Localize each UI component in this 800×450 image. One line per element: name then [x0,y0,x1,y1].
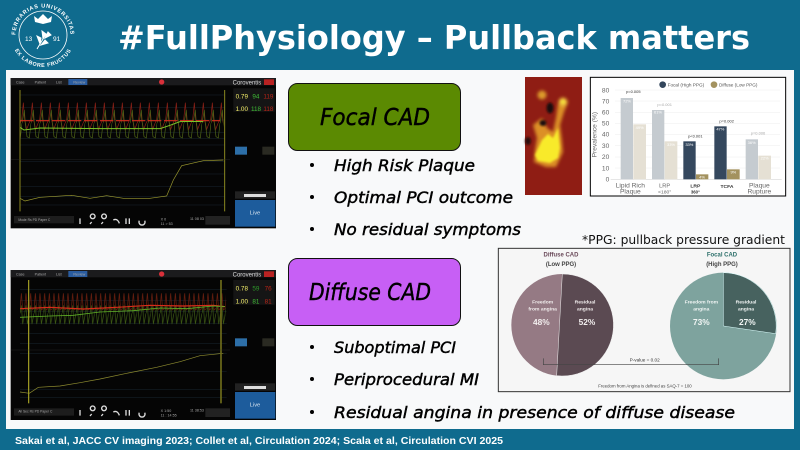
panel: diffuse CAD pressure monitor: 11 : 14:55 [161,413,177,417]
panel: diffuse CAD pressure monitor: Case [16,273,25,277]
panel: diffuse CAD pressure monitor: List [56,273,62,277]
p-values: p=0.001 [657,102,673,107]
p-values: p<0.001 [688,133,703,138]
pie chart: diffuse CAD: (Low PPG) [546,262,576,268]
category labels: Plaque [749,182,770,189]
chart axis: 10 [602,165,610,172]
pie chart: focal CAD [670,253,777,379]
focal CAD bullet list [310,156,521,239]
bar chart: plaque features by PPG [590,77,786,196]
panel: focal CAD pressure monitor [11,78,276,228]
pie chart: diffuse CAD: from angina [528,307,557,313]
p-values: p=0.005 [626,89,641,94]
pie chart: focal CAD: Focal CAD [707,253,738,259]
pie chart: focal CAD: 27% [739,317,756,327]
p-values: p=0.006 [751,131,766,136]
panel: diffuse CAD pressure monitor: 81 [252,298,260,305]
chart axis: 0 [606,177,610,184]
pie chart: diffuse CAD: 52% [579,317,596,327]
chart axis: 80 [602,87,610,94]
bar value labels: 33% [685,142,694,147]
category labels: Lipid Rich [616,182,645,189]
pie chart: focal CAD: Residual [736,300,757,306]
bar value labels: 47% [716,127,725,132]
panel: focal CAD pressure monitor: 11 08 03 [190,217,204,221]
panel: diffuse CAD pressure monitor: Coroventis [233,272,261,278]
panel: freedom from angina pie charts [498,248,790,392]
panel: focal CAD pressure monitor: 11 > 53 [161,222,173,226]
panel: focal CAD pressure monitor: 1.00 [236,106,248,113]
panel: focal CAD pressure monitor: 0.79 [236,94,248,101]
panel: diffuse CAD pressure monitor: Review [73,273,86,277]
logo: university seal: 91 [53,36,61,43]
footnote: PPG definition: *PPG: pullback pressure gradient [582,232,785,247]
category labels [616,182,771,195]
p-value bracket [543,357,719,365]
p-value bracket: P-value = 0.02 [630,357,660,362]
category labels: Plaque [620,188,641,195]
category labels: 360° [691,189,700,194]
panel: focal CAD pressure monitor: Review [73,80,86,84]
chart bars [621,98,771,179]
title: #FullPhysiology – Pullback matters [118,18,750,57]
references: Sakai et al, JACC CV imaging 2023; Collet et al, Circulation 2024; Scala et al, Circulation CVI 2025 [15,435,503,447]
pie chart: diffuse CAD: angina [577,307,593,313]
bar value labels: 61% [654,109,662,114]
chart axis: 70 [602,98,610,105]
diffuse CAD bullet list: Suboptimal PCI [334,338,456,357]
panel: diffuse CAD pressure monitor: All Sec Rs PD Paper C [18,410,53,414]
chart axis: 50 [602,121,610,128]
pie chart: focal CAD: angina [738,307,754,313]
panel: diffuse CAD pressure monitor: 11 38:53 [190,409,204,413]
category labels: LRP [690,183,701,189]
pie chart: focal CAD: angina [693,307,710,313]
bar value labels: 22% [761,155,769,160]
panel: focal CAD pressure monitor: 118 [263,106,274,113]
logo: university seal [12,4,74,67]
p-values [626,89,766,138]
panel: diffuse CAD pressure monitor: 76 [265,286,272,293]
bar value labels: 36% [748,140,756,145]
logo: university seal: FERRARIAS UNIVERSITAS [12,4,74,35]
chart axis: Prevalence (%) [591,112,598,157]
pie chart: diffuse CAD: Freedom [532,300,554,306]
focal CAD bullet list: Optimal PCI outcome [334,188,513,207]
content panel [6,70,794,429]
panel: diffuse CAD pressure monitor: 59 [252,286,260,293]
pie chart: diffuse CAD: 48% [533,317,550,327]
panel: diffuse CAD pressure monitor: 81 [265,298,272,305]
chart axis: 40 [602,132,610,139]
chart legend: Diffuse (Low PPG) [719,82,758,87]
bar value labels: 4% [699,175,705,180]
p-values: p=0.002 [719,118,735,123]
diffuse CAD bullet list [310,338,735,422]
panel: focal CAD pressure monitor: 118 [251,106,262,113]
chart legend: Focal (High PPG) [668,82,705,87]
category labels: TCFA [720,184,734,190]
chart legend [659,81,758,88]
panel: diffuse CAD pressure monitor: Patient [35,273,46,277]
panel: diffuse CAD pressure monitor: 1.00 [236,298,248,305]
definition note: Freedom from Angina is defined as SAQ-7 = 100 [598,384,692,389]
bar value labels: 72% [623,98,631,103]
pie chart: focal CAD: (High PPG) [706,262,738,268]
bar value labels [623,98,769,180]
heat map: plaque image [525,77,582,195]
panel: focal CAD pressure monitor: Case [16,80,25,84]
chart axis [591,87,782,184]
panel: focal CAD pressure monitor: 94 [252,94,260,101]
diffuse CAD bullet list: Residual angina in presence of diffuse disease [334,403,735,422]
chart axis: 60 [602,109,610,116]
focal CAD label box: Focal CAD [320,105,430,131]
bar value labels: 49% [636,125,644,130]
chart axis: 30 [602,143,610,150]
pie chart: diffuse CAD: Residual [575,300,596,306]
diffuse CAD bullet list: Periprocedural MI [334,370,479,389]
panel: diffuse CAD pressure monitor: Live [250,403,260,409]
panel: focal CAD pressure monitor: 119 [263,94,274,101]
panel: focal CAD pressure monitor: Mode Rs PD Paper C [18,218,51,222]
bar value labels: 33% [667,142,675,147]
panel: focal CAD pressure monitor: Coroventis [233,80,261,86]
panel: diffuse CAD pressure monitor: 0.78 [236,286,248,293]
panel: diffuse CAD pressure monitor: X 1:50 [161,409,171,413]
panel: focal CAD pressure monitor: X 0 [161,218,166,222]
logo: university seal: 13 [25,36,33,43]
chart axis: 20 [602,154,610,161]
logo: university seal: EX LABORE FRUCTUS [15,48,70,67]
category labels: LRP [659,183,670,189]
panel: focal CAD pressure monitor: List [56,80,62,84]
diffuse CAD label box: Diffuse CAD [309,280,431,306]
panel: focal CAD pressure monitor: Live [250,211,260,217]
panel: focal CAD pressure monitor: Patient [35,80,46,84]
focal CAD bullet list: High Risk Plaque [334,156,475,175]
focal CAD bullet list: No residual symptoms [334,220,521,239]
focal CAD label box [288,84,460,150]
panel: diffuse CAD pressure monitor [11,270,276,420]
category labels: Rupture [747,188,771,195]
pie chart: focal CAD: 73% [693,317,710,327]
pie chart: focal CAD: Freedom from [685,300,719,306]
pie chart: diffuse CAD: Diffuse CAD [544,253,579,259]
diffuse CAD label box [288,258,460,326]
category labels: <180° [658,189,671,195]
bar value labels: 9% [730,170,737,175]
pie chart: diffuse CAD [511,253,613,376]
